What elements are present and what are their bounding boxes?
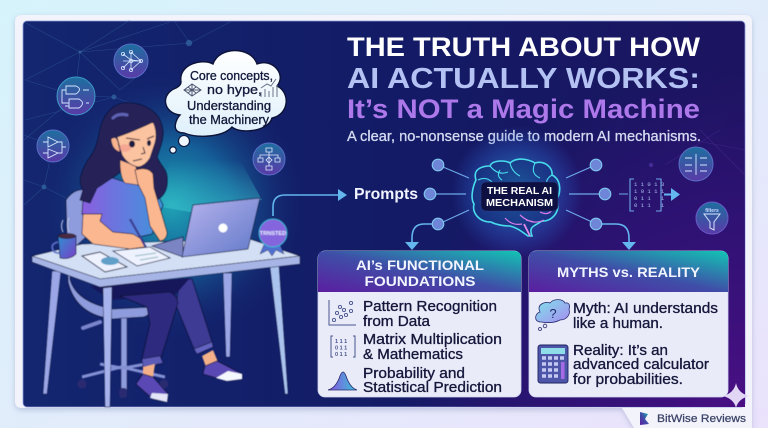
brain lower folds bbox=[505, 210, 552, 224]
brain diagram: MECHANISM bbox=[486, 198, 553, 209]
prompts label: Prompts bbox=[354, 186, 418, 203]
arm and chin hand bbox=[135, 169, 167, 241]
foundations heading: AI’s FUNCTIONAL bbox=[356, 257, 484, 273]
foundations heading: FOUNDATIONS bbox=[364, 273, 476, 289]
writing arm bbox=[82, 214, 145, 249]
reality text bbox=[573, 343, 709, 388]
brain stem highlight bbox=[524, 224, 530, 236]
icon: bell curve bbox=[328, 372, 357, 390]
desk back legs bbox=[43, 271, 232, 394]
icon: scatter plot bbox=[329, 300, 356, 325]
myth text: like a human. bbox=[573, 316, 663, 332]
foundations header bbox=[318, 251, 521, 292]
panel: myths vs reality bbox=[529, 251, 728, 397]
long hair bbox=[80, 103, 167, 203]
reality text: Reality: It’s an bbox=[573, 343, 668, 359]
item: probability bbox=[363, 366, 502, 396]
pen bbox=[130, 219, 148, 251]
laptop screen bbox=[182, 198, 260, 257]
subtitle: A clear, no-nonsense guide to modern AI mechanisms. bbox=[347, 129, 701, 145]
mechanism label bbox=[481, 182, 558, 211]
brain outline bbox=[472, 159, 560, 236]
title: AI ACTUALLY WORKS: bbox=[347, 63, 700, 95]
laptop light beam bbox=[150, 160, 262, 212]
connector lines and nodes bbox=[424, 159, 611, 230]
laptop logo bbox=[218, 224, 228, 232]
reality text: for probabilities. bbox=[573, 372, 683, 388]
chair bbox=[66, 190, 168, 398]
myths header bbox=[529, 251, 728, 292]
brain folds bbox=[478, 163, 552, 186]
icon: data flow orb bbox=[679, 147, 713, 181]
laptop base bbox=[152, 237, 183, 257]
arrow: laptop to prompts bbox=[273, 189, 347, 216]
icon: flowchart orb bbox=[253, 143, 285, 175]
item: pattern recognition bbox=[363, 299, 497, 330]
network nodes bbox=[42, 40, 653, 189]
title: It’s NOT a Magic Machine bbox=[347, 94, 700, 124]
matrix graphic: 0 1 1 1 bbox=[634, 202, 665, 209]
neck bbox=[120, 160, 138, 185]
arrow: to myths panel bbox=[602, 224, 636, 250]
item: probability: Probability and bbox=[363, 366, 465, 382]
desk top bbox=[32, 239, 300, 279]
footer logo bbox=[640, 412, 649, 425]
reality text: advanced calculator bbox=[573, 357, 709, 373]
brain diagram bbox=[451, 126, 583, 258]
trusted badge bbox=[259, 219, 287, 256]
desk edge bbox=[32, 256, 300, 287]
footer brand: BitWise Reviews bbox=[657, 413, 747, 425]
matrix graphic bbox=[619, 179, 665, 211]
item: probability: Statistical Prediction bbox=[363, 380, 502, 396]
paper lines bbox=[135, 253, 158, 260]
matrix graphic: 1 1 0 1 3 bbox=[634, 181, 664, 188]
myths heading: MYTHS vs. REALITY bbox=[557, 264, 701, 280]
item: matrix multiplication: Matrix Multiplication bbox=[363, 332, 502, 348]
bubble text: the Machinery bbox=[189, 112, 269, 127]
icon: matrix: 0 1 1 bbox=[335, 346, 347, 352]
icon: calculator bbox=[538, 345, 568, 383]
notebook sketch bbox=[101, 257, 119, 265]
item: matrix multiplication: & Mathematics bbox=[363, 347, 463, 363]
item: matrix multiplication bbox=[363, 332, 502, 363]
matrix graphic: 0 1 1 1 bbox=[634, 195, 665, 202]
panel: AI's functional foundations bbox=[318, 251, 521, 397]
foundations heading bbox=[356, 257, 484, 289]
icon: matrix: 0 1 1 bbox=[335, 352, 347, 358]
icon: matrix bbox=[331, 336, 355, 358]
icon: mini chart bbox=[261, 79, 277, 97]
item: pattern recognition: Pattern Recognition bbox=[363, 299, 497, 315]
facial features bbox=[119, 136, 154, 161]
arrow: to foundations panel bbox=[405, 224, 432, 250]
icon: filter funnel orb: filters bbox=[705, 208, 719, 214]
icon: mini network bbox=[184, 84, 201, 96]
icon: amplifier orb bbox=[37, 130, 69, 162]
myth text: Myth: AI understands bbox=[573, 301, 718, 317]
myth text bbox=[573, 301, 718, 332]
bubble text: no hype, bbox=[207, 82, 262, 97]
bubble text: Core concepts, bbox=[190, 68, 273, 83]
trusted badge: TRNSTED bbox=[260, 231, 286, 237]
paper bbox=[113, 247, 170, 266]
icon: question cloud bbox=[536, 300, 570, 330]
under-desk thigh shadow bbox=[90, 278, 190, 300]
mug bbox=[52, 218, 76, 258]
back leg and shoe bbox=[176, 279, 242, 381]
desk front leg bbox=[103, 287, 112, 407]
bubble text bbox=[187, 68, 273, 127]
illustration: woman at desk bbox=[32, 103, 300, 407]
bubble text: Understanding bbox=[187, 98, 271, 113]
item: pattern recognition: from Data bbox=[363, 314, 431, 330]
icon: filter funnel orb bbox=[696, 202, 728, 234]
shirt bbox=[82, 175, 163, 245]
title: THE TRUTH ABOUT HOW bbox=[347, 32, 701, 62]
arrow: matrix output bbox=[664, 188, 680, 201]
brain diagram: THE REAL AI bbox=[487, 186, 552, 197]
front leg and shoe bbox=[120, 292, 178, 402]
icon: question cloud: ? bbox=[549, 306, 557, 321]
notebook bbox=[82, 252, 127, 272]
matrix graphic: 1 0 1 1 1 bbox=[634, 188, 665, 195]
thought bubble bbox=[165, 50, 286, 153]
ear bbox=[111, 138, 120, 152]
icon: neural network orb bbox=[114, 44, 148, 78]
sparkle bbox=[723, 383, 749, 408]
background network lines bbox=[24, 20, 745, 205]
face bbox=[117, 122, 156, 167]
title bbox=[347, 32, 701, 124]
icon: logic gates orb bbox=[57, 77, 95, 115]
hair highlight bbox=[113, 114, 127, 118]
icon: matrix: 1 1 1 bbox=[335, 339, 347, 345]
